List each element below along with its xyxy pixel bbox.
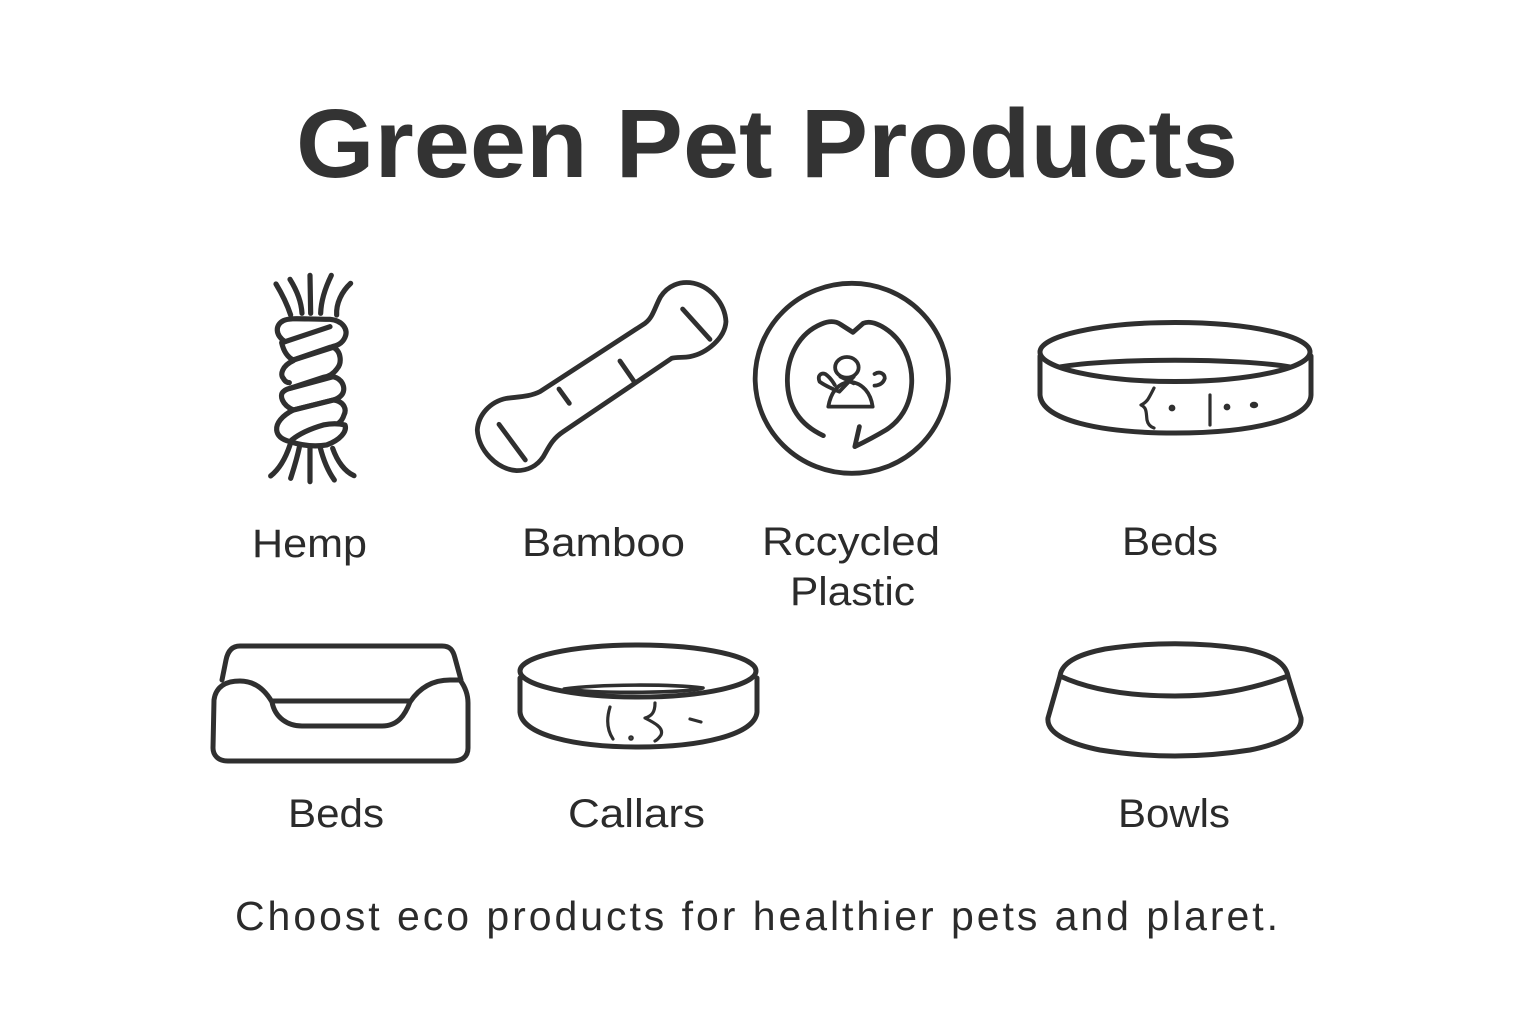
label: Callars: Callars [568,792,705,836]
icon: bed-style band [1040,322,1311,433]
label: Beds (top): Beds [1122,520,1218,564]
icon: bowl [1048,644,1301,756]
tagline: Choost eco products for healthier pets and plaret. [235,893,1278,939]
icon: recycled plastic plate [755,283,948,473]
label: Recycled Plastic: Plastic [790,570,915,614]
icon: hemp rope [271,275,354,482]
label: Bowls: Bowls [1118,792,1230,836]
label: Recycled Plastic [762,520,940,614]
icon: bed [213,646,468,761]
label: Beds (bottom): Beds [288,792,384,836]
label: Hemp: Hemp [252,522,367,566]
icon: bamboo bone [477,282,726,471]
icon: collar [520,645,757,747]
label: Bamboo: Bamboo [522,521,685,565]
title: Green Pet Products [296,89,1238,198]
label: Recycled Plastic: Rccycled [762,520,940,564]
